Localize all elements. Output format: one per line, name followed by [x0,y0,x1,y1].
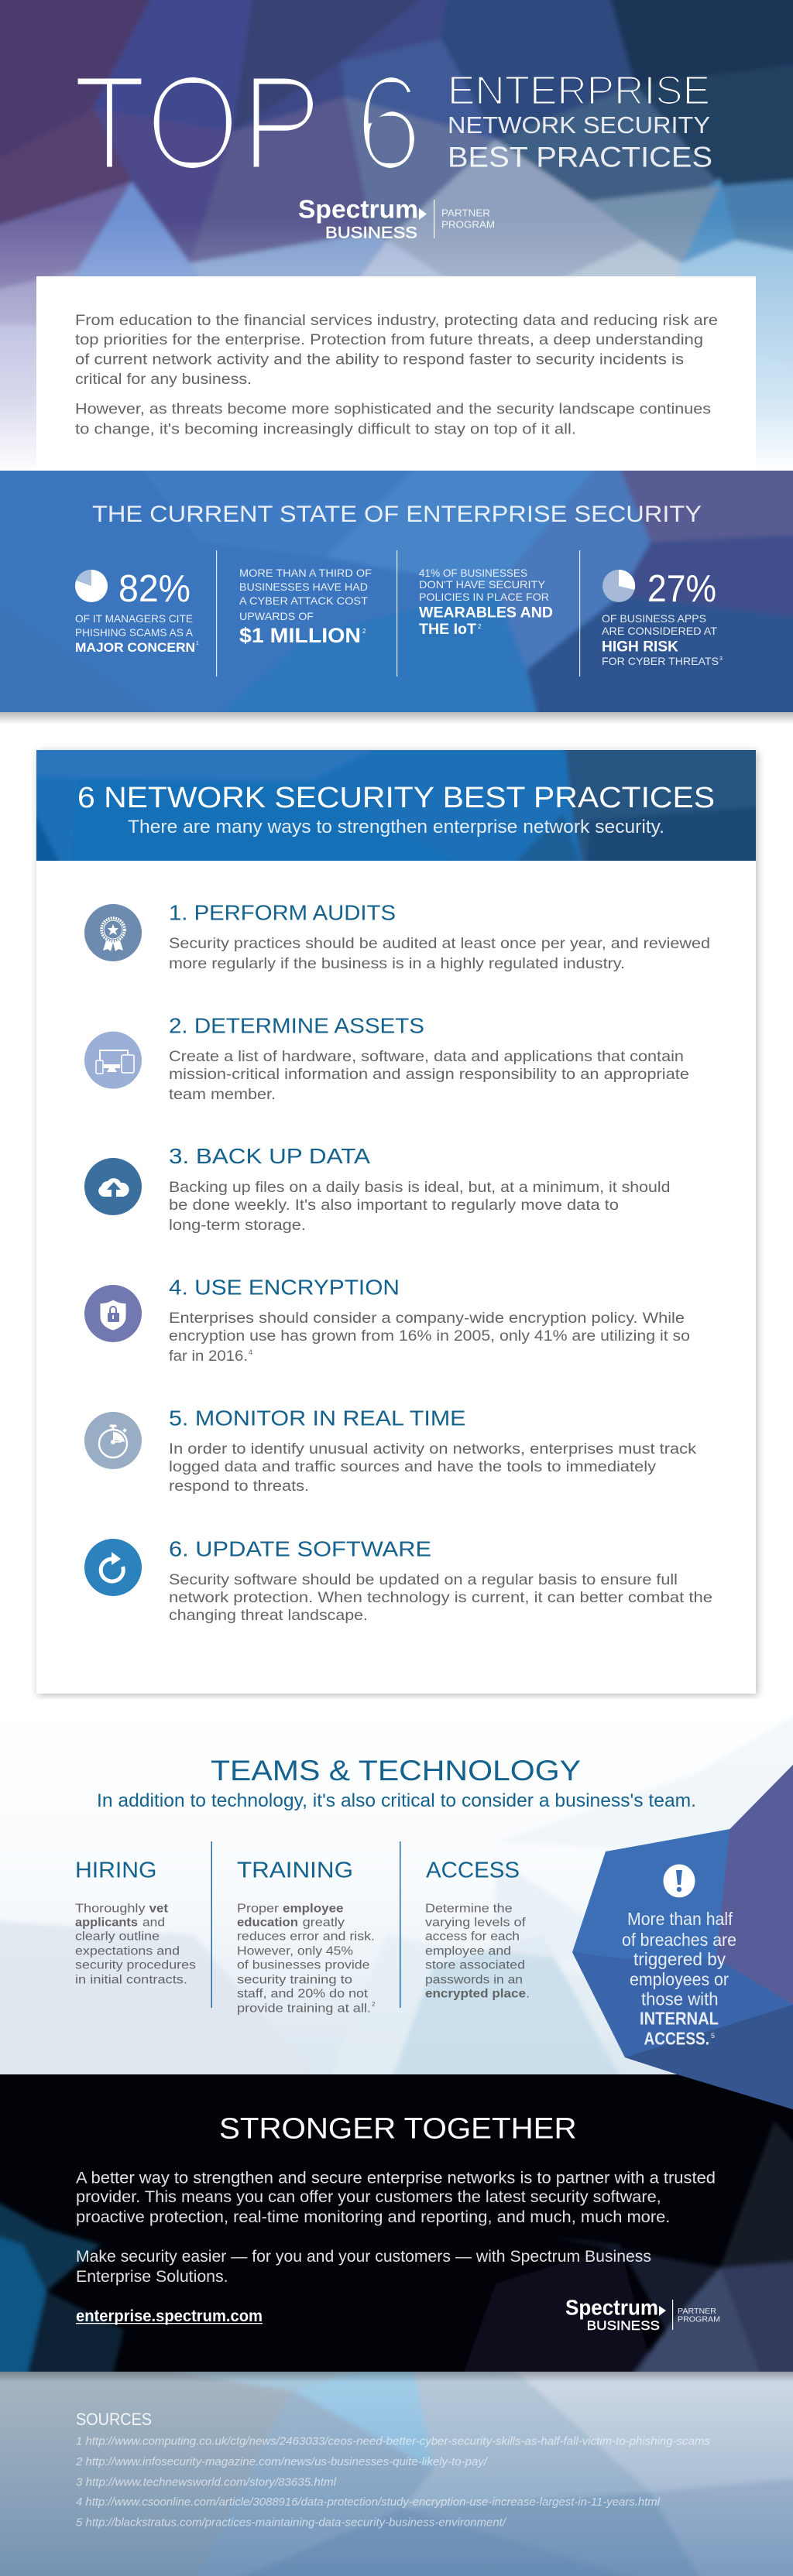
panel: six best practices card [15,728,782,1694]
stat: 27 percent: OF BUSINESS APPS [602,612,706,625]
item: use encryption: 4. USE ENCRYPTION [169,1276,400,1300]
stat: 27 percent: ARE CONSIDERED AT [602,625,717,637]
stat: one million: 2 [362,628,366,635]
stat: wearables and IoT: DON'T HAVE SECURITY [419,578,546,591]
column: hiring: HIRING [75,1858,156,1883]
text: intro paragraphs: critical for any business. [75,372,252,388]
background: black low-poly [0,2074,793,2392]
logo: Spectrum Business Partner Program [298,195,495,242]
logo: Spectrum Business Partner Program: PROGRAM [441,219,495,231]
stat: one million [239,567,372,647]
column: training: greatly [303,1917,345,1930]
column: training: 2 [372,2001,376,2008]
panel: hero header [0,0,793,497]
text: source list: 1 http://www.computing.co.uk/ctg/news/2463033/ceos-need-better-cyber-security-skills-as-half-fall-victim-to-phishing-scams [76,2435,710,2448]
stat: one million: MORE THAN A THIRD OF [239,567,372,579]
text: callout: those with [641,1989,719,2009]
subheading: In addition to technology, it's also critical to consider a business's team. [97,1790,696,1811]
card header [36,750,756,861]
stat: 27 percent: FOR CYBER THREATS [602,655,719,667]
title: enterprise network security best practices: NETWORK SECURITY [448,111,710,139]
logo: Spectrum Business Partner Program: PARTNER [441,207,490,218]
stat: wearables and IoT: POLICIES IN PLACE FOR [419,591,549,603]
text: intro paragraphs: However, as threats become more sophisticated and the security landscape continues [75,402,711,418]
panel: current state of enterprise security [0,471,793,723]
background: sources low-poly [0,2353,793,2576]
item: use encryption: encryption use has grown from 16% in 2005, only 41% are utilizing it so [169,1327,690,1345]
background: teams low-poly [0,1699,793,2090]
chart: pie 82 percent [75,570,108,602]
column: hiring: security procedures [75,1959,196,1972]
panel: intro card [36,276,756,470]
column: access: ACCESS [426,1858,520,1883]
column: training: reduces error and risk. [237,1930,375,1944]
subheading: There are many ways to strengthen enterprise network security. [128,817,664,838]
item: determine assets: 2. DETERMINE ASSETS [169,1014,424,1038]
column: training [237,1858,376,2015]
item: update software: Security software should be updated on a regular basis to ensure full [169,1571,678,1588]
column: hiring: expectations and [75,1945,180,1958]
stat: 27 percent: 3 [719,656,723,662]
stat: wearables and IoT: 41% OF BUSINESSES [419,567,527,579]
item: monitor in real time: respond to threats. [169,1478,309,1495]
column: hiring: clearly outline [75,1930,160,1944]
icon: stopwatch [84,1412,142,1469]
callout: internal access breach stat [572,1765,793,2109]
column: training: employee [283,1903,344,1916]
text: source list [75,2435,710,2530]
heading: six network security best practices: 6 NETWORK SECURITY BEST PRACTICES [77,782,715,814]
stat: 82 percent: OF IT MANAGERS CITE [75,612,193,625]
item: use encryption: Enterprises should consider a company-wide encryption policy. While [169,1310,685,1327]
background: blue band low-poly [0,471,793,712]
stat: 82 percent: MAJOR CONCERN [75,641,195,655]
text: intro paragraphs: From education to the financial services industry, protecting data and reducing risk are [75,313,718,329]
item: monitor in real time [84,1406,696,1495]
stat: 27 percent: HIGH RISK [602,639,678,655]
text: source list: 5 http://blackstratus.com/practices-maintaining-data-security-business-environment/ [76,2516,507,2530]
text: callout: employees or [630,1969,729,1989]
shadow under band [0,712,793,724]
column: training: security training to [237,1974,352,1987]
item: back up data: be done weekly. It's also important to regularly move data to [169,1197,619,1214]
panel: stronger together [0,2074,793,2392]
title: TOP 6: TOP 6 [72,46,423,198]
heading: current state: THE CURRENT STATE OF ENTERPRISE SECURITY [92,502,702,527]
column: hiring: in initial contracts. [75,1974,187,1987]
text: source list: 3 http://www.technewsworld.com/story/83635.html [76,2475,337,2489]
stat: wearables and IoT: THE IoT [419,622,476,638]
item: monitor in real time: 5. MONITOR IN REAL TIME [169,1406,466,1430]
logo: Spectrum Business footer: PARTNER [678,2307,716,2316]
text: intro paragraphs: top priorities for the enterprise. Protection from future threats, a deep understanding [75,332,703,348]
stat: wearables and IoT [419,567,553,638]
background: hero low-poly [0,0,793,497]
logo: Spectrum Business footer: BUSINESS [587,2318,660,2333]
text: partner paragraph: proactive protection, real-time monitoring and reporting, and much, much more. [76,2208,670,2226]
icon: cloud upload [84,1158,142,1215]
column: access: encrypted place [425,1988,526,2001]
item: determine assets: mission-critical information and assign responsibility to an appropriate [169,1066,689,1083]
text: partner paragraph: Enterprise Solutions. [76,2268,228,2286]
column: training: Proper [237,1903,279,1916]
column: training: However, only 45% [237,1945,353,1958]
text: intro paragraphs [75,313,718,438]
title: enterprise network security best practices [448,69,712,173]
stat: 82 percent: 82% [118,568,191,610]
text: callout: ACCESS. [644,2029,709,2049]
item: back up data [84,1144,671,1234]
column: hiring: vet [149,1903,168,1916]
text: intro paragraphs: to change, it's becoming increasingly difficult to stay on top of it all. [75,422,576,438]
item: update software: changing threat landscape. [169,1607,368,1624]
column: hiring: applicants [75,1917,138,1930]
text: partner paragraph: A better way to strengthen and secure enterprise networks is to partner with a trusted [76,2169,716,2187]
text: partner paragraph: Make security easier — for you and your customers — with Spectrum Business [76,2248,651,2266]
column: hiring: Thoroughly [75,1903,146,1916]
stat: 82 percent: 1 [196,641,199,646]
panel: sources [0,2353,793,2576]
text: callout: triggered by [633,1949,726,1969]
item: back up data: long-term storage. [169,1217,306,1234]
logo: Spectrum Business footer: PROGRAM [678,2314,720,2324]
item: perform audits [84,901,710,972]
stat: one million: UPWARDS OF [239,610,314,622]
text: callout: INTERNAL [640,2009,719,2029]
item: determine assets [84,1014,689,1103]
item: use encryption [84,1276,690,1365]
item: back up data: 3. BACK UP DATA [169,1144,370,1168]
text: source list: 4 http://www.csoonline.com/article/3088916/data-protection/study-encryption-use-increase-largest-in-11-years.html [76,2496,661,2509]
item: determine assets: team member. [169,1086,276,1103]
column: hiring: and [142,1917,165,1930]
text: callout: 5 [711,2032,715,2040]
text: intro paragraphs: of current network activity and the ability to respond faster to security incidents is [75,351,684,368]
stat: one million: A CYBER ATTACK COST [239,594,368,607]
item: update software: network protection. When technology is current, it can better combat the [169,1589,712,1606]
logo: Spectrum Business Partner Program: BUSINESS [325,224,417,242]
column: hiring [75,1858,196,1987]
column: access: Determine the [425,1903,513,1916]
column: access: store associated [425,1959,525,1972]
logo: Spectrum Business footer [565,2296,720,2333]
stat: wearables and IoT: WEARABLES AND [419,605,553,621]
column: access: varying levels of [425,1917,526,1930]
icon: devices [84,1032,142,1089]
item: monitor in real time: logged data and traffic sources and have the tools to immediately [169,1458,656,1475]
text: callout: More than half [627,1909,733,1929]
text: source list: 2 http://www.infosecurity-magazine.com/news/us-businesses-quite-likely-to-pay/ [75,2455,489,2468]
stat: one million: $1 MILLION [239,624,361,647]
stat: 82 percent [75,568,199,655]
icon: refresh arrow [84,1539,142,1596]
stat: 82 percent: PHISHING SCAMS AS A [75,626,194,639]
item: back up data: Backing up files on a daily basis is ideal, but, at a minimum, it should [169,1179,671,1196]
column: access: access for each [425,1930,520,1944]
column: training: of businesses provide [237,1959,370,1972]
item: update software: 6. UPDATE SOFTWARE [169,1537,431,1560]
item: monitor in real time: In order to identify unusual activity on networks, enterprises must track [169,1440,696,1458]
heading: teams and technology: TEAMS & TECHNOLOGY [211,1755,581,1786]
text: callout [622,1909,736,2049]
column: training: staff, and 20% do not [237,1988,369,2001]
column: training: provide training at all. [237,2002,371,2015]
heading: sources: SOURCES [76,2410,152,2429]
item: determine assets: Create a list of hardware, software, data and applications that contain [169,1048,684,1065]
icon: award rosette [84,904,142,961]
title: enterprise network security best practices: ENTERPRISE [448,69,710,114]
column: training: education [237,1917,298,1930]
heading: stronger together: STRONGER TOGETHER [219,2113,577,2146]
panel: teams and technology [0,1699,793,2090]
text: callout: of breaches are [622,1930,736,1950]
text: partner paragraph: provider. This means you can offer your customers the latest security software, [76,2188,661,2206]
item: use encryption: 4 [249,1348,252,1356]
column: training: TRAINING [237,1858,353,1883]
logo: Spectrum Business footer: Spectrum [565,2296,658,2320]
item: perform audits: 1. PERFORM AUDITS [169,901,396,924]
item: perform audits: Security practices should be audited at least once per year, and reviewed [169,935,710,952]
stat: wearables and IoT: 2 [478,623,482,630]
text: partner paragraph [76,2169,716,2286]
column: access: passwords in an [425,1974,523,1987]
column: access: . [527,1988,530,2001]
stat: one million: BUSINESSES HAVE HAD [239,581,368,593]
icon: exclamation [663,1864,695,1898]
title: enterprise network security best practices: BEST PRACTICES [448,141,712,173]
item: update software [84,1537,712,1624]
link: enterprise.spectrum.com: enterprise.spectrum.com [76,2307,263,2325]
stat: 27 percent: 27% [647,568,716,610]
icon: shield lock [84,1285,142,1342]
column: access [425,1858,530,2001]
column: access: employee and [425,1945,511,1958]
stat: 27 percent [602,568,723,667]
logo: Spectrum Business Partner Program: Spectrum [298,195,418,223]
item: use encryption: far in 2016. [169,1348,248,1365]
chart: pie 27 percent [602,570,635,602]
item: perform audits: more regularly if the business is in a highly regulated industry. [169,955,625,972]
